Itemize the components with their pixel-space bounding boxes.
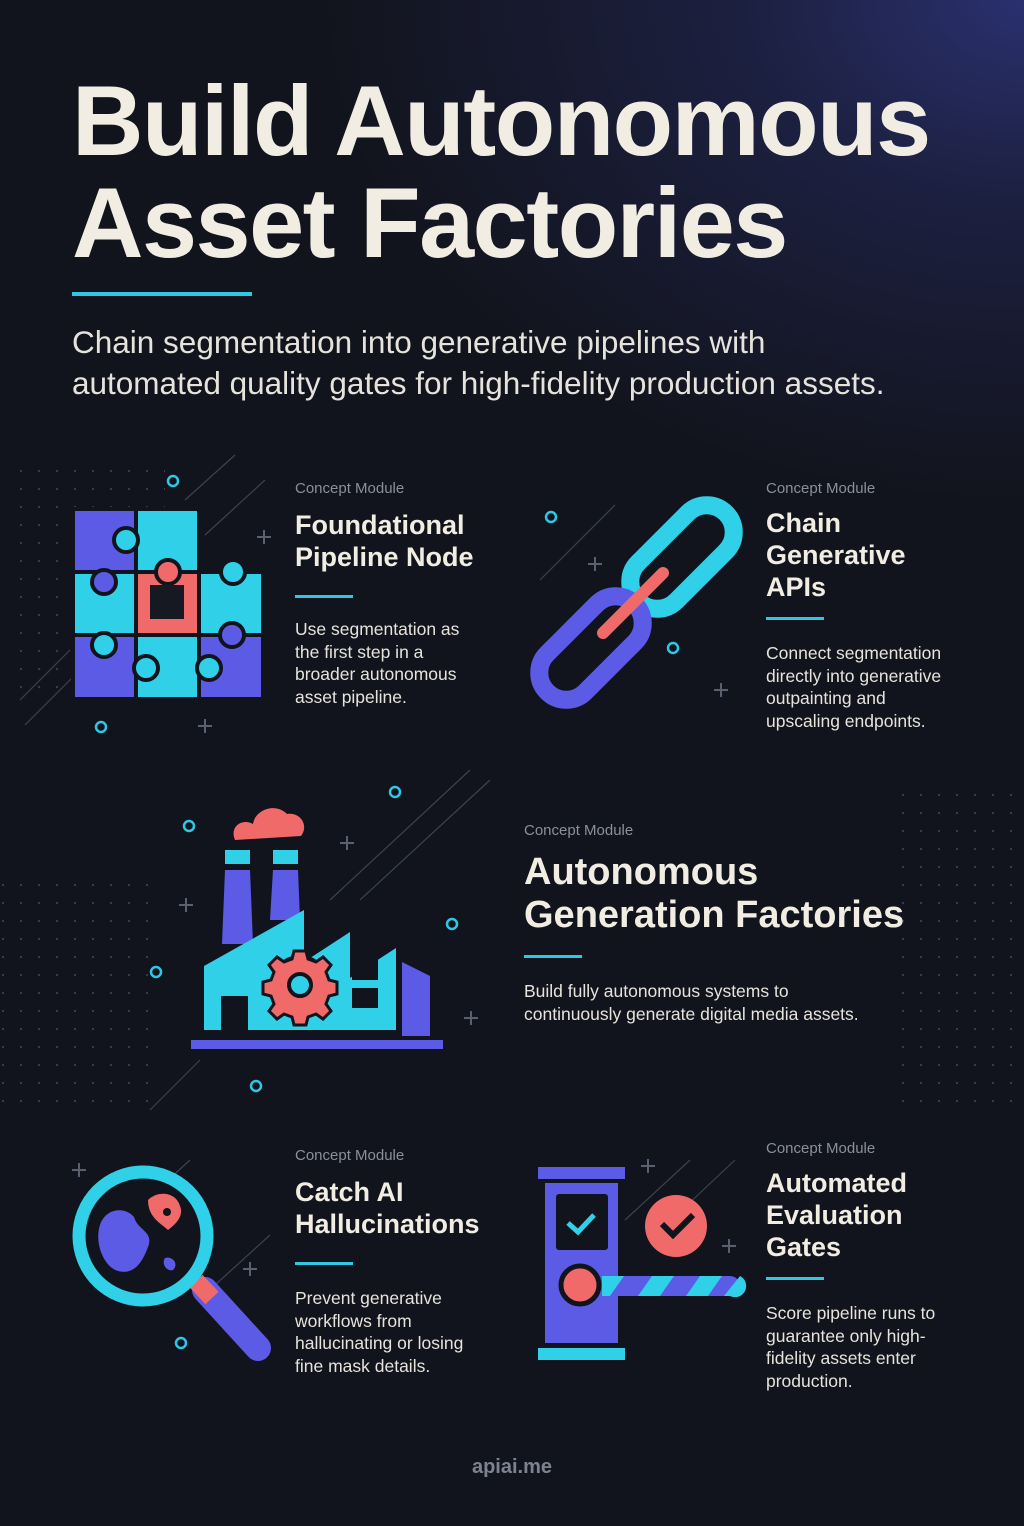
text block: Evaluation bbox=[766, 1200, 903, 1230]
title: Build Autonomous bbox=[72, 65, 930, 176]
icon: gate bbox=[538, 1159, 746, 1360]
text block: Build fully autonomous systems to bbox=[524, 981, 789, 1001]
text block: Autonomous bbox=[524, 851, 758, 893]
text block: outpainting and bbox=[766, 688, 886, 708]
icon: factory bbox=[150, 786, 478, 1092]
text block: Catch AI bbox=[295, 1177, 404, 1207]
text block: guarantee only high- bbox=[766, 1326, 926, 1346]
panel: foundational pipeline node bbox=[71, 474, 474, 734]
title: Asset Factories bbox=[72, 167, 787, 278]
text block: fidelity assets enter bbox=[766, 1348, 916, 1368]
text block: Generative bbox=[766, 540, 906, 570]
text block: fine mask details. bbox=[295, 1356, 430, 1376]
text block: directly into generative bbox=[766, 666, 941, 686]
text block: Hallucinations bbox=[295, 1209, 480, 1239]
text block bbox=[766, 480, 941, 730]
text block: APIs bbox=[766, 572, 826, 602]
text block: Concept Module bbox=[295, 480, 404, 497]
text block: Concept Module bbox=[766, 1140, 875, 1157]
text block: Foundational bbox=[295, 510, 464, 540]
title bbox=[72, 65, 930, 278]
text block: Concept Module bbox=[766, 480, 875, 497]
text block: workflows from bbox=[295, 1310, 412, 1330]
text block: continuously generate digital media assets. bbox=[524, 1004, 859, 1024]
subtitle: automated quality gates for high-fidelity production assets. bbox=[72, 365, 884, 401]
subtitle: Chain segmentation into generative pipelines with bbox=[72, 324, 765, 360]
text block: Concept Module bbox=[524, 822, 633, 839]
text block: Use segmentation as bbox=[295, 619, 459, 639]
text block bbox=[524, 822, 904, 1024]
footer: apiai.me bbox=[472, 1456, 552, 1478]
text block: upscaling endpoints. bbox=[766, 710, 926, 730]
text block: Score pipeline runs to bbox=[766, 1303, 935, 1323]
text block: Gates bbox=[766, 1232, 841, 1262]
panel: autonomous generation factories bbox=[150, 786, 904, 1092]
text block: Concept Module bbox=[295, 1147, 404, 1164]
icon: magnifier globe bbox=[72, 1163, 271, 1361]
icon: puzzle bbox=[71, 474, 271, 734]
text block: the first step in a bbox=[295, 642, 423, 662]
text block: Pipeline Node bbox=[295, 542, 474, 572]
text block: Generation Factories bbox=[524, 894, 904, 936]
text block: broader autonomous bbox=[295, 664, 456, 684]
text block: asset pipeline. bbox=[295, 686, 407, 706]
icon: chain link bbox=[530, 496, 743, 709]
text block: Prevent generative bbox=[295, 1288, 442, 1308]
text block: Automated bbox=[766, 1168, 907, 1198]
panel: catch ai hallucinations bbox=[72, 1147, 480, 1376]
text block: Chain bbox=[766, 508, 841, 538]
text block: production. bbox=[766, 1370, 853, 1390]
subtitle bbox=[72, 324, 884, 401]
text block bbox=[295, 1147, 480, 1376]
text block bbox=[295, 480, 474, 706]
text block: Connect segmentation bbox=[766, 643, 941, 663]
text block bbox=[766, 1140, 935, 1390]
text block: hallucinating or losing bbox=[295, 1333, 463, 1353]
panel: automated evaluation gates bbox=[538, 1140, 935, 1390]
panel: chain generative apis bbox=[530, 480, 941, 730]
title underline bbox=[72, 292, 252, 296]
